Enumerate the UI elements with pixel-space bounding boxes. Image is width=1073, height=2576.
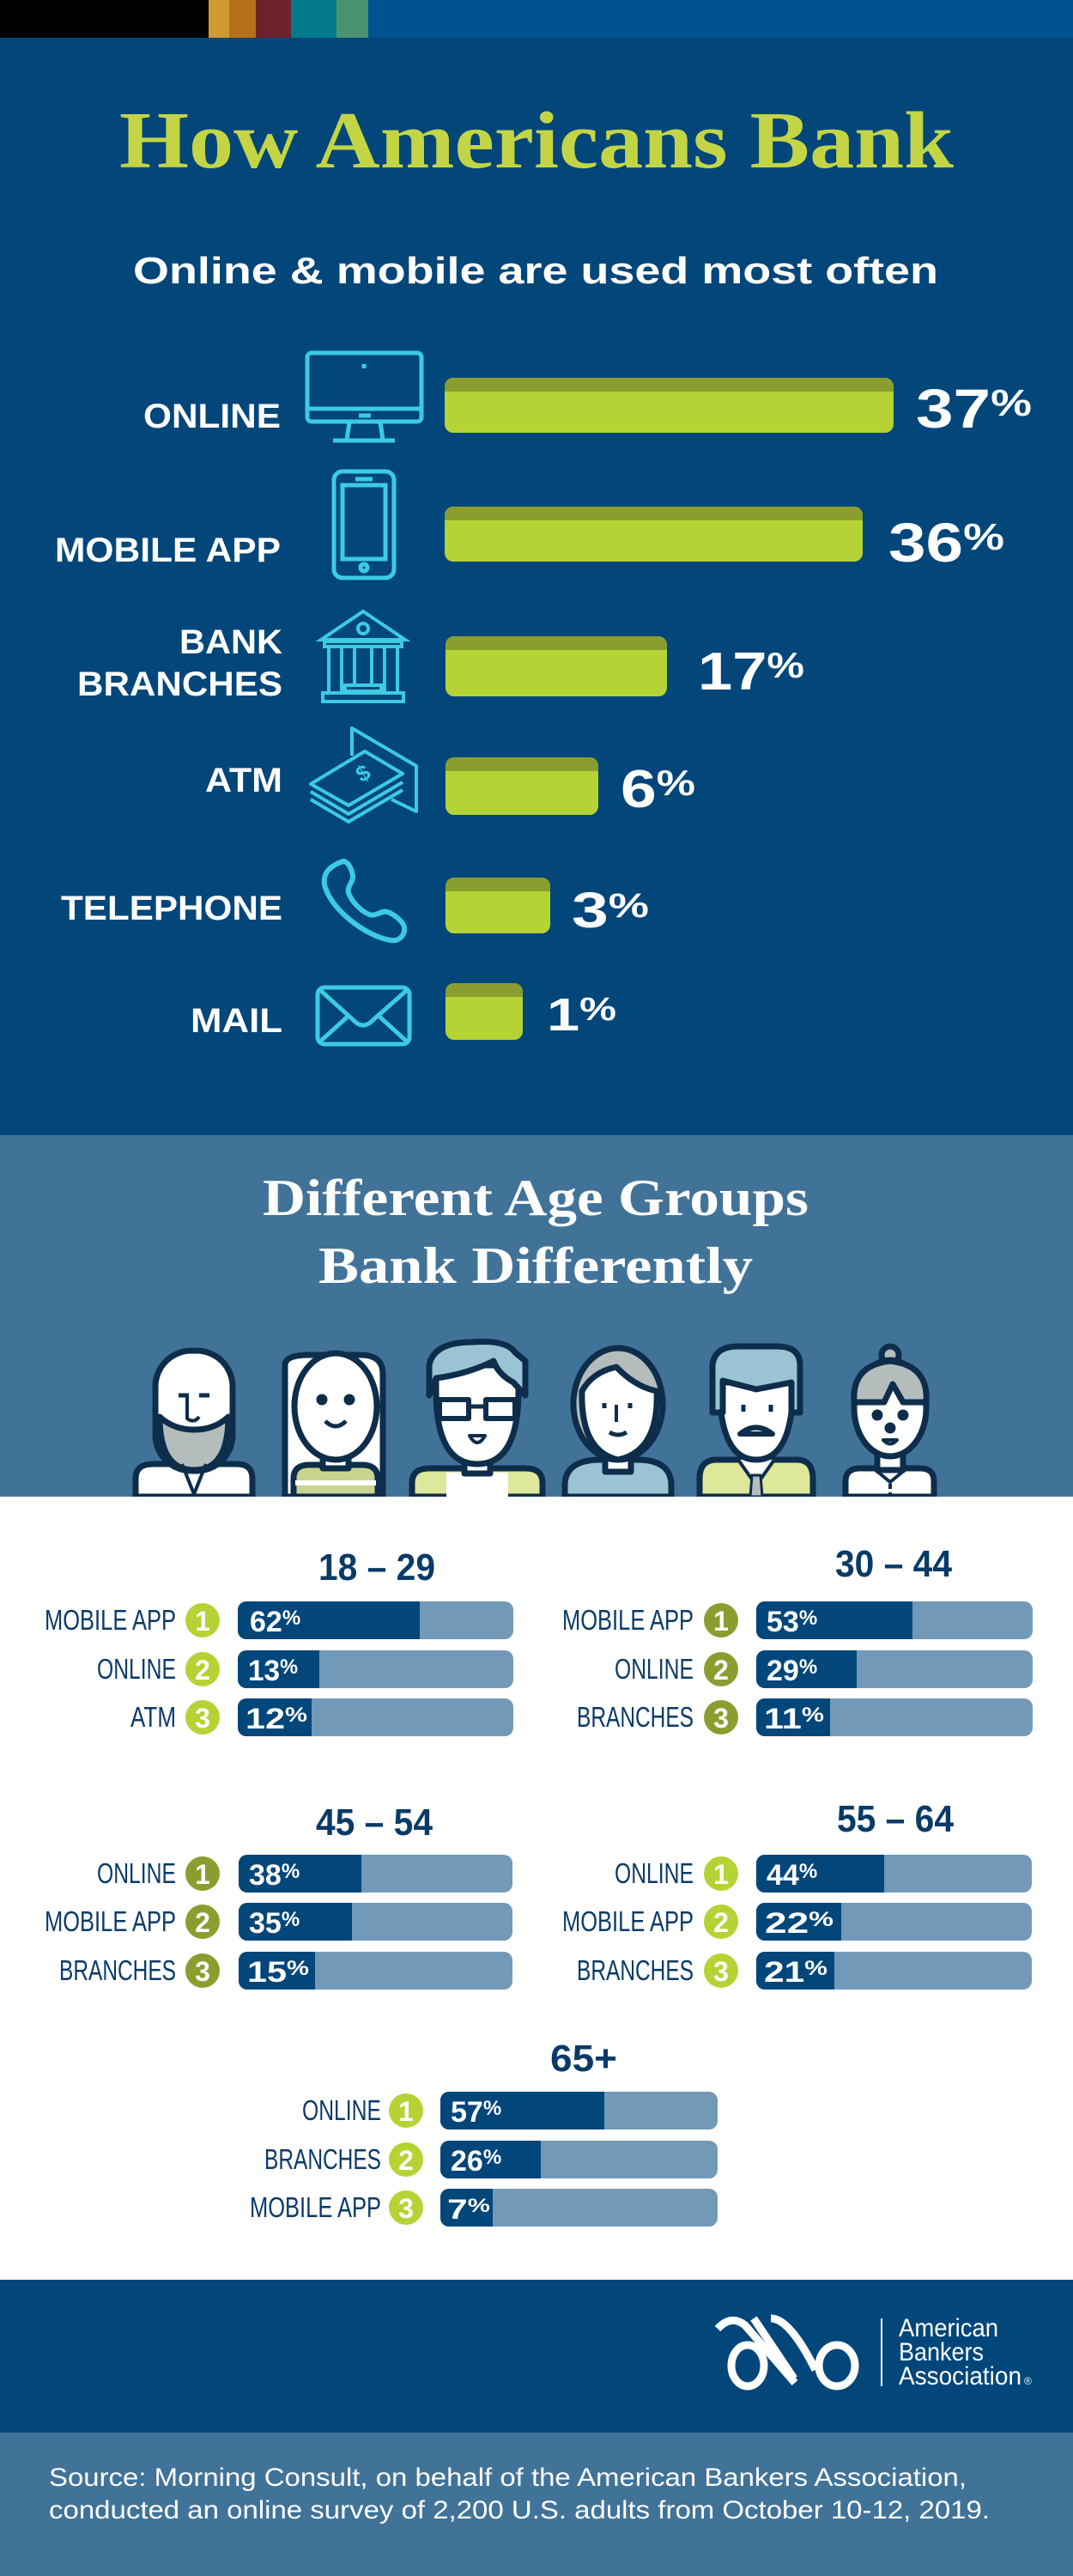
logo text: American (899, 2314, 998, 2342)
row: mobile app: 36 (888, 512, 949, 574)
group 18-29: ATM (130, 1701, 176, 1733)
row: mobile app (55, 471, 1004, 578)
face 6 bun (846, 1346, 934, 1497)
group 30-44: % (802, 1704, 824, 1727)
group 18-29: 13 (248, 1655, 281, 1687)
group 55-64: BRANCHES (577, 1954, 694, 1986)
icon: atm cash: $ (351, 759, 375, 787)
group 18-29: 12 (246, 1703, 278, 1735)
group 55-64: 21 (764, 1956, 797, 1989)
footer: source note: Source: Morning Consult, on behalf of the American Bankers Association, (49, 2464, 967, 2492)
footer: logo band (0, 2280, 1073, 2433)
row: mobile app: MOBILE APP (55, 532, 281, 569)
row: mobile app: % (963, 516, 1004, 558)
heading: Different Age Groups (263, 1170, 809, 1226)
row: telephone: TELEPHONE (61, 890, 282, 927)
group 55-64: ONLINE (615, 1857, 694, 1889)
group 30-44: ONLINE (615, 1653, 694, 1685)
group 18-29: % (280, 1656, 298, 1679)
row: online: 37 (916, 378, 977, 440)
group 45-54: 1 (195, 1859, 210, 1890)
group 30-44: 2 (713, 1655, 729, 1686)
face 2 long hair (285, 1353, 383, 1497)
face 1 bearded (136, 1351, 252, 1497)
illustration: six faces (136, 1341, 934, 1497)
group 30-44: MOBILE APP (562, 1604, 694, 1636)
group 18-29: 2 (195, 1655, 210, 1686)
group 45-54: % (282, 1908, 300, 1931)
group 45-54: % (287, 1957, 309, 1980)
row: atm: ATM (205, 762, 282, 799)
logo text (899, 2314, 1032, 2391)
row: online: ONLINE (143, 398, 281, 435)
group 18-29 (45, 1546, 513, 1736)
face 4 older woman (565, 1348, 671, 1497)
panel: age groups header (0, 1135, 1073, 1497)
row: online (143, 353, 1032, 440)
group 18-29: 3 (195, 1703, 210, 1734)
group 55-64: 1 (713, 1859, 729, 1890)
group 30-44: BRANCHES (577, 1701, 694, 1733)
icon: atm cash (311, 728, 416, 822)
group 30-44: % (799, 1607, 817, 1630)
face 5 mustache tie (700, 1346, 813, 1497)
group 45-54: 35 (249, 1907, 282, 1940)
row: atm: % (657, 762, 695, 803)
group 45-54: 2 (195, 1907, 210, 1938)
group 65+: 3 (398, 2193, 414, 2224)
footer: source note (0, 2433, 1073, 2576)
panel: channel usage (0, 38, 1073, 1135)
title: How Americans Bank (119, 96, 955, 185)
row: bank branches: BANK (179, 623, 282, 661)
group 18-29: MOBILE APP (45, 1604, 176, 1636)
group 55-64: 44 (767, 1859, 799, 1892)
group 30-44: 1 (713, 1606, 729, 1637)
group 45-54: MOBILE APP (45, 1905, 176, 1937)
group 30-44 (562, 1543, 1033, 1736)
group 65+: 2 (398, 2145, 414, 2176)
group 65+: 26 (451, 2145, 483, 2178)
icon: bank (321, 611, 405, 702)
group 55-64: 55 – 64 (837, 1798, 954, 1840)
panel: age group results (0, 1497, 1073, 2280)
group 18-29: 62 (250, 1606, 282, 1638)
row: mail: 1 (547, 989, 573, 1041)
group 18-29: 18 – 29 (318, 1546, 435, 1589)
group 45-54: 15 (247, 1956, 280, 1989)
group 65+: MOBILE APP (250, 2191, 381, 2223)
group 55-64: 3 (713, 1956, 729, 1987)
group 55-64: % (799, 1860, 817, 1883)
group 30-44: 11 (764, 1703, 795, 1735)
group 55-64: % (809, 1908, 834, 1931)
row: bank branches: BRANCHES (77, 665, 282, 703)
group 45-54: 45 – 54 (316, 1801, 433, 1844)
group 55-64: 2 (713, 1907, 729, 1938)
subtitle: Online & mobile are used most often (133, 250, 938, 292)
group 55-64: 22 (765, 1907, 797, 1940)
icon: envelope (318, 987, 409, 1044)
row: mail: MAIL (191, 1002, 282, 1040)
icon: phone (334, 471, 394, 578)
row: mail: % (579, 992, 616, 1028)
group 18-29: % (285, 1704, 307, 1727)
row: bank branches: % (767, 645, 804, 685)
group 65+: 65+ (550, 2038, 617, 2080)
group 55-64 (562, 1798, 1032, 1990)
group 65+: % (468, 2195, 490, 2216)
logo: ABA mark (718, 2318, 855, 2386)
group 30-44: 53 (767, 1606, 799, 1638)
group 65+ (250, 2038, 718, 2227)
group 65+: 7 (447, 2194, 463, 2225)
group 65+: % (483, 2097, 501, 2120)
logo text: ® (1024, 2375, 1032, 2387)
row: atm (205, 728, 695, 822)
face 3 glasses (412, 1341, 543, 1497)
group 18-29: 1 (195, 1606, 210, 1637)
icon: monitor (307, 353, 421, 440)
group 30-44: 29 (767, 1655, 799, 1687)
group 45-54: ONLINE (97, 1857, 176, 1889)
group 18-29: % (282, 1607, 300, 1630)
group 45-54: 38 (249, 1859, 282, 1892)
group 18-29: ONLINE (97, 1653, 176, 1685)
logo text: Bankers (899, 2338, 984, 2366)
row: online: % (991, 382, 1032, 424)
group 65+: 57 (451, 2096, 483, 2129)
group 65+: % (483, 2146, 501, 2169)
footer: source note: conducted an online survey of 2,200 U.S. adults from October 10-12, 2019. (49, 2496, 990, 2524)
row: telephone (61, 861, 649, 940)
group 45-54: BRANCHES (59, 1954, 176, 1986)
icon: telephone (324, 861, 404, 940)
group 55-64: MOBILE APP (562, 1905, 694, 1937)
group 65+: 1 (398, 2096, 414, 2127)
group 65+: ONLINE (302, 2094, 381, 2126)
group 45-54: 3 (195, 1956, 210, 1987)
group 65+: BRANCHES (264, 2143, 381, 2175)
row: atm: 6 (621, 760, 650, 819)
top color stripe (0, 0, 1073, 38)
row: telephone: % (609, 887, 649, 925)
group 45-54 (45, 1801, 512, 1990)
group 30-44: 3 (713, 1703, 729, 1734)
group 45-54: % (282, 1860, 300, 1883)
group 30-44: % (799, 1656, 817, 1679)
group 30-44: 30 – 44 (835, 1543, 952, 1585)
row: telephone: 3 (572, 883, 599, 939)
panel: age groups header: Bank Differently (318, 1237, 753, 1294)
row: bank branches (77, 611, 804, 703)
row: mail (191, 983, 616, 1044)
logo text: Association (899, 2362, 1021, 2391)
row: bank branches: 17 (698, 642, 757, 702)
group 55-64: % (804, 1957, 827, 1980)
